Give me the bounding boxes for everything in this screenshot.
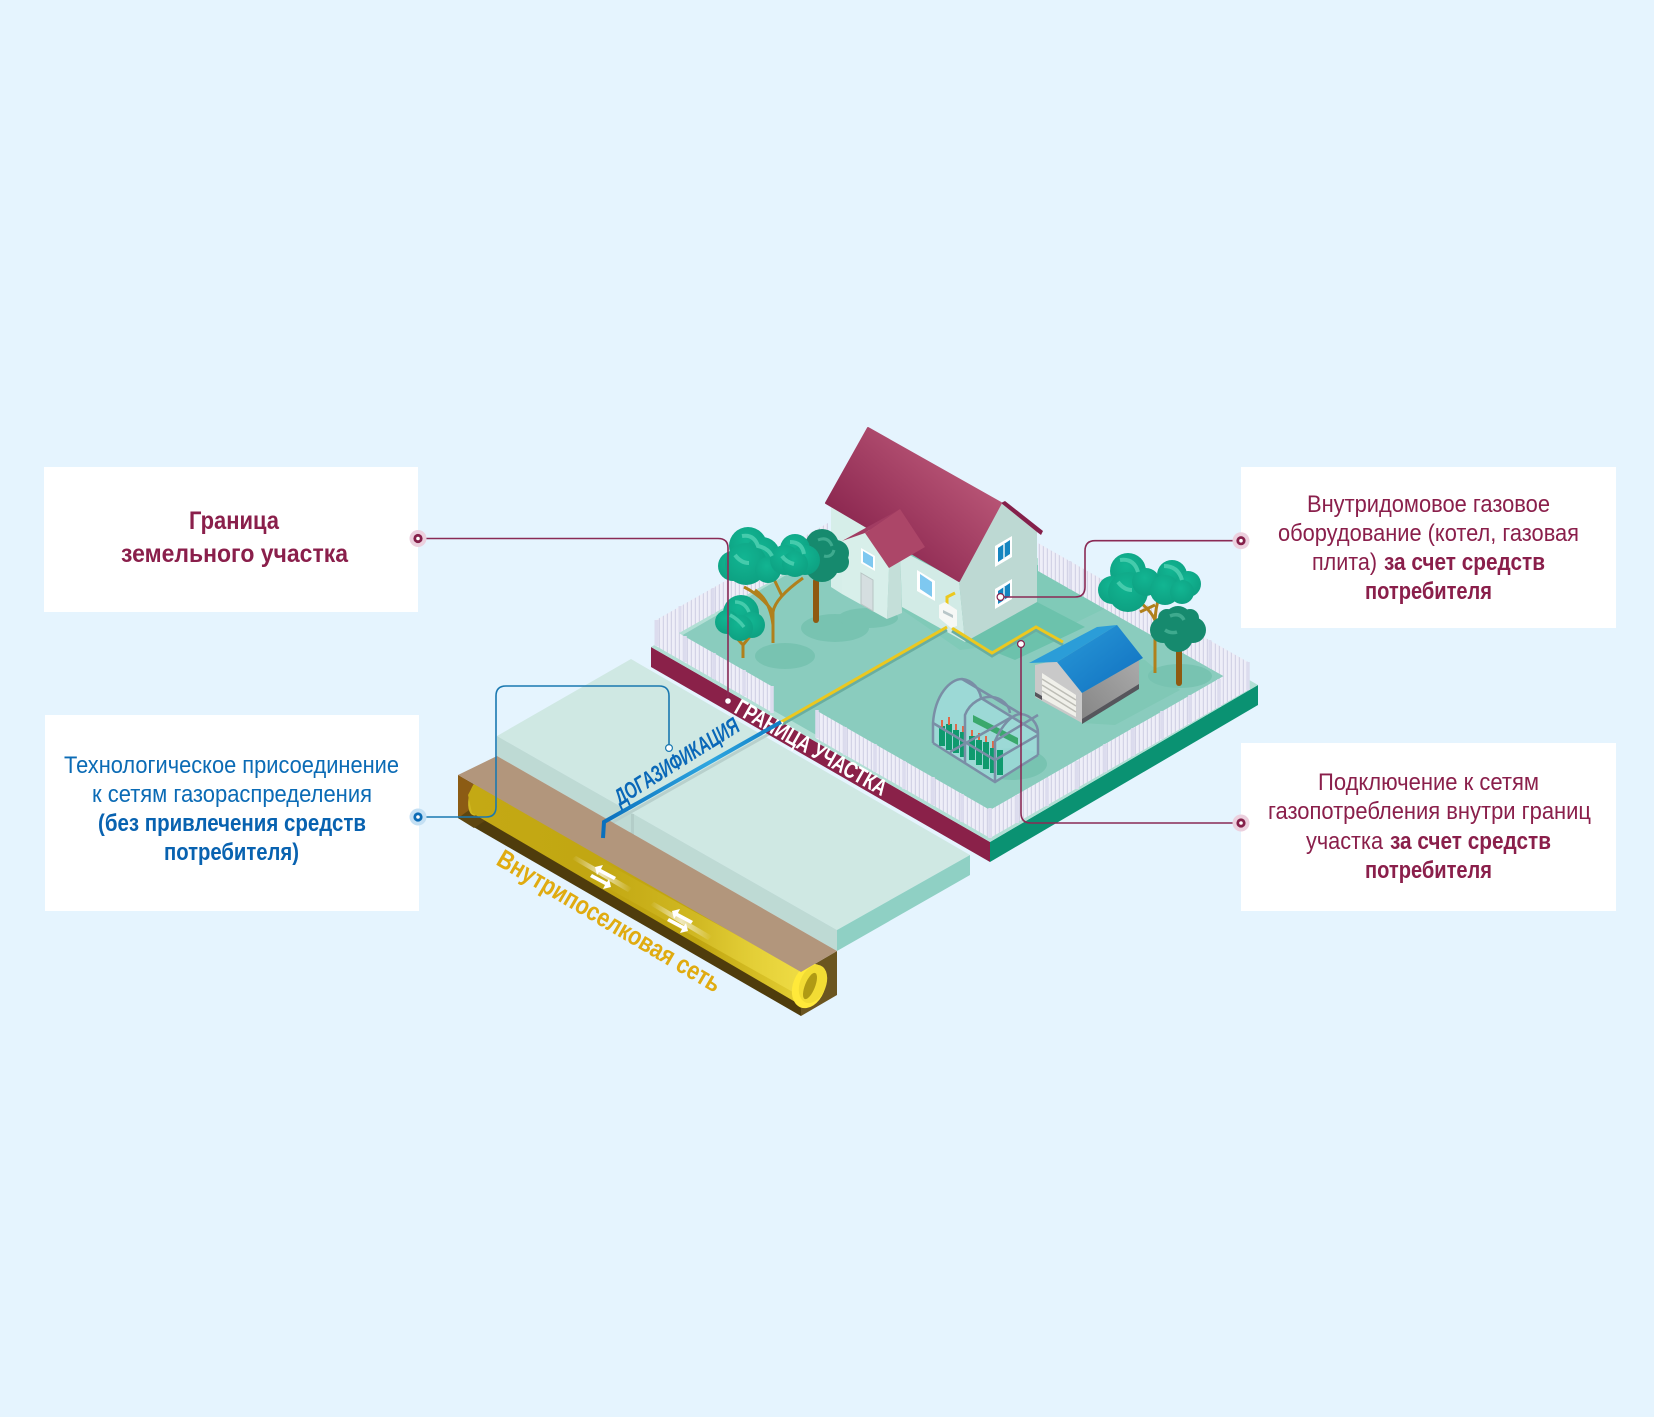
- panel: land plot boundary: земельного участка: [121, 540, 349, 568]
- tree shadows: [755, 608, 1212, 780]
- blue connection pipe: [603, 722, 781, 838]
- road slab: [497, 659, 970, 951]
- tree group right: [1098, 553, 1206, 686]
- icon: flow arrows 1: [572, 856, 632, 892]
- boundary label on the plot edge: ГРАНИЦА УЧАСТКА: [731, 694, 892, 801]
- panel: in-house gas equipment: потребителя: [1365, 578, 1492, 605]
- tree group left: [715, 527, 849, 658]
- callout line: connection within plot: [1018, 641, 1250, 832]
- yellow gas pipe on the plot: [781, 593, 1063, 725]
- garage: [1029, 625, 1143, 724]
- dark tree: [795, 529, 849, 623]
- panel: technological connection: к сетям газораспределения: [92, 781, 372, 808]
- panel: connection within the plot: [1241, 743, 1616, 911]
- house: [826, 428, 1043, 642]
- icon: flow arrows 2: [650, 902, 712, 940]
- gas meter: [939, 602, 957, 628]
- dark tree right: [1150, 606, 1206, 686]
- windows: [861, 536, 1012, 609]
- panel: in-house gas equipment: за счет средств: [1384, 549, 1545, 576]
- panel: technological connection: [45, 715, 419, 911]
- callout line: technological connection: [410, 686, 672, 826]
- panel: connection within the plot: газопотребления внутри границ: [1268, 798, 1591, 825]
- panel: in-house gas equipment: оборудование (котел, газовая: [1278, 520, 1579, 547]
- panel: in-house gas equipment: Внутридомовое газовое: [1307, 491, 1550, 518]
- main roof: [826, 428, 1001, 581]
- large tree: [718, 527, 820, 643]
- front fence, right part: [816, 710, 990, 838]
- panel: technological connection: (без привлечения средств: [98, 810, 366, 837]
- panel: connection within the plot: потребителя: [1365, 857, 1492, 884]
- panel: technological connection: Технологическое присоединение: [64, 752, 399, 779]
- side fence: [990, 662, 1248, 838]
- trench with gas main pipe: [458, 756, 837, 1016]
- front fence, left part: [656, 620, 773, 713]
- label: gas main: Внутрипоселковая сеть: [492, 843, 727, 998]
- panel: connection within the plot: Подключение к сетям: [1318, 769, 1539, 796]
- panel: technological connection: потребителя): [164, 839, 299, 866]
- plants: [942, 724, 1000, 775]
- land plot: [651, 490, 1258, 862]
- greenhouse: [933, 679, 1038, 782]
- door: [861, 573, 873, 611]
- panel: land plot boundary: Граница: [189, 507, 280, 535]
- label: extra gasification: ДОГАЗИФИКАЦИЯ: [608, 712, 745, 811]
- panel: connection within the plot: за счет средств: [1390, 828, 1551, 855]
- callout line: in-house equipment: [997, 532, 1250, 600]
- garage roof: [1029, 625, 1117, 663]
- panel: in-house gas equipment: [1241, 467, 1616, 628]
- panel: connection within the plot: участка: [1306, 828, 1384, 855]
- dormer roof: [842, 509, 925, 568]
- callout line: plot boundary: [410, 530, 731, 704]
- back fence: [656, 523, 1248, 690]
- panel: land plot boundary: [44, 467, 418, 612]
- panel: in-house gas equipment: плита): [1312, 549, 1377, 576]
- small tree: [715, 595, 765, 658]
- icon: pipe end: [786, 959, 833, 1013]
